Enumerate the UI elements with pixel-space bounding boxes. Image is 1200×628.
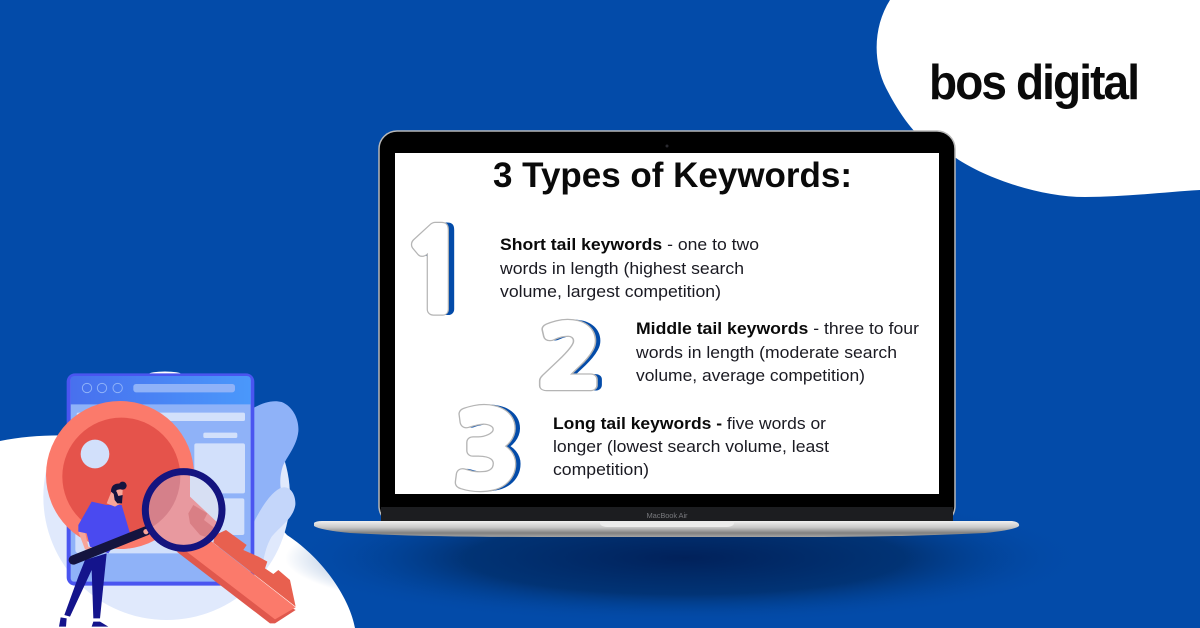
logo: bos digital: bos digital — [929, 56, 1140, 110]
left arm hand — [78, 532, 95, 551]
numeral 3: 3 — [454, 401, 519, 501]
numeral 1: 1 — [402, 218, 469, 327]
numeral 2: 2 — [539, 317, 601, 398]
magnifying glass — [68, 468, 226, 565]
browser window — [67, 373, 254, 586]
slide title: 3 Types of Keywords: — [493, 156, 852, 195]
neck and face — [107, 488, 123, 507]
key — [46, 401, 296, 623]
white blob: bottom left — [0, 435, 355, 628]
key shaft — [187, 542, 296, 619]
webcam — [666, 144, 668, 148]
text block 1: Short tail keywords - one to two — [500, 236, 759, 254]
handle — [73, 531, 147, 560]
text block 2: words in length (moderate search — [635, 344, 897, 362]
hand — [143, 529, 149, 534]
numeral 2: 2 — [539, 317, 601, 398]
text block 2: volume, average competition) — [636, 367, 865, 385]
text block 3: competition) — [553, 461, 649, 479]
text block 2: Middle tail keywords - three to four — [636, 320, 920, 338]
text block 1: words in length (highest search — [499, 260, 744, 278]
numeral 1: 1 — [408, 218, 475, 327]
laptop lid — [379, 131, 955, 524]
hair — [119, 482, 127, 490]
laptop screen — [395, 153, 939, 494]
key head — [46, 401, 194, 549]
beard — [113, 492, 123, 503]
text block 3 — [553, 415, 829, 479]
laptop label: MacBook Air — [646, 511, 688, 520]
key shaft underside — [177, 550, 296, 623]
white blob crest — [149, 372, 181, 376]
torso — [78, 502, 130, 553]
laptop notch — [600, 521, 734, 527]
rim — [145, 472, 222, 548]
leaf: upper — [250, 401, 298, 537]
text block 1: volume, largest competition) — [500, 283, 721, 301]
laptop chin — [381, 507, 953, 522]
text block 2 — [635, 320, 920, 385]
numeral 3: 3 — [459, 401, 524, 501]
laptop base — [314, 521, 1019, 537]
man — [59, 482, 130, 627]
text block 3: longer (lowest search volume, least — [553, 438, 829, 456]
backdrop circle — [43, 373, 290, 620]
laptop — [314, 131, 1019, 537]
shoes — [59, 617, 108, 627]
legs — [64, 553, 107, 618]
leaf: lower — [250, 487, 295, 560]
numeral 2: 2 — [544, 317, 606, 398]
key shaft teeth — [213, 530, 296, 607]
key hole — [81, 440, 109, 468]
laptop shadow — [285, 492, 1085, 624]
text block 1 — [499, 236, 759, 301]
white blob: top right — [877, 0, 1200, 197]
numeral 3: 3 — [454, 401, 519, 501]
lens view — [148, 475, 216, 545]
numeral 1: 1 — [402, 218, 469, 327]
text block 3: Long tail keywords - five words or — [553, 415, 827, 433]
illustration: key, browser and man — [43, 373, 298, 627]
